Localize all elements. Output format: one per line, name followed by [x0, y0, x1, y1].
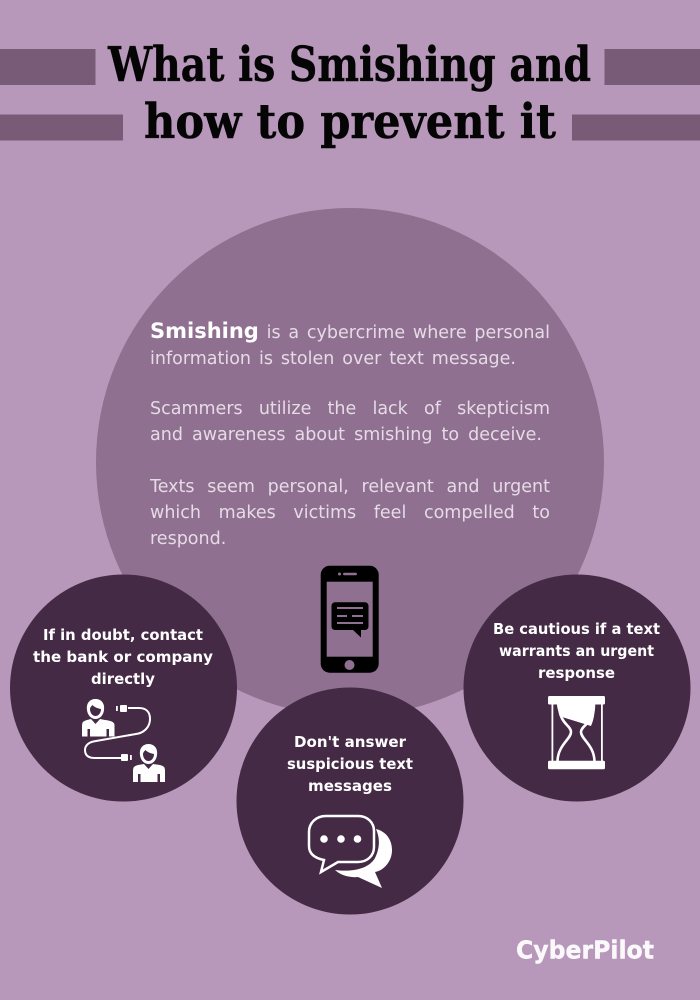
label: be cautious: [493, 620, 661, 682]
label: be cautious: warrants an urgent: [499, 642, 655, 660]
title banner: how to prevent it: [144, 94, 556, 150]
text block: scammers: and awareness about smishing to deceive.: [150, 425, 542, 445]
text block: texts seem personal: respond.: [150, 529, 226, 549]
panel: central circle: [96, 208, 604, 716]
text block: scammers: Scammers utilize the lack of skepticism: [150, 399, 550, 419]
text block: texts seem personal: Texts seem personal, relevant and urgent: [150, 477, 550, 497]
icon: two people connected by a cable: [82, 699, 165, 782]
icon: smartphone with message: [321, 566, 379, 673]
text block: texts seem personal: [150, 474, 552, 554]
label: contact the bank: the bank or company: [33, 648, 213, 666]
label: contact the bank: If in doubt, contact: [43, 626, 204, 644]
panel: don't answer: [236, 688, 464, 914]
logo: CyberPilot: CyberPilot: [516, 936, 654, 964]
label: contact the bank: directly: [91, 670, 155, 688]
label: don't answer: suspicious text: [287, 755, 414, 773]
panel: contact the bank: [10, 574, 237, 802]
panel: be cautious: [464, 574, 690, 802]
label: don't answer: messages: [308, 777, 392, 795]
label: don't answer: Don't answer: [294, 733, 406, 751]
label: be cautious: Be cautious if a text: [493, 620, 661, 638]
text block: smishing definition: [150, 318, 552, 374]
title banner: [0, 37, 700, 150]
title banner: What is Smishing and: [107, 37, 591, 93]
label: contact the bank: [33, 626, 213, 688]
label: be cautious: response: [538, 664, 615, 682]
text block: smishing definition: Smishing is a cybercrime where personal: [150, 319, 550, 343]
text block: smishing definition: information is stolen over text message.: [150, 349, 516, 369]
text block: scammers: [150, 396, 552, 450]
label: don't answer: [287, 733, 414, 795]
icon: chat bubbles: [309, 816, 392, 888]
text block: texts seem personal: which makes victims feel compelled to: [150, 503, 550, 523]
icon: hourglass: [548, 696, 605, 769]
